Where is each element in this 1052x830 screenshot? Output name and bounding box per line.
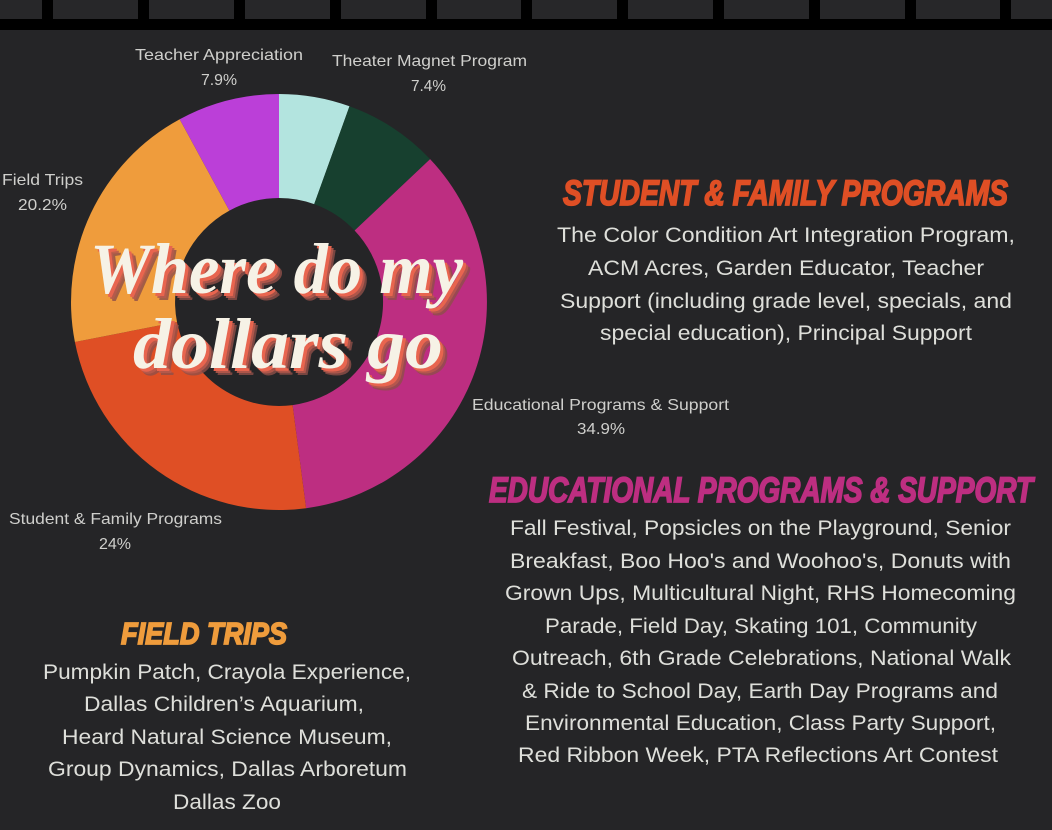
label: Theater Magnet Program [332, 53, 527, 95]
title: Where do my [95, 234, 469, 314]
segment: Theater Magnet Program [314, 106, 430, 230]
text: Field Trips details: Dallas Zoo [173, 791, 281, 814]
segment: Field Trips [71, 119, 229, 342]
label: Student & Family Programs: Student & Family Programs [9, 511, 222, 528]
text: Educational Programs & Support details: Breakfast, Boo Hoo's and Woohoo's, Donuts with [510, 550, 1011, 573]
label: Student & Family Programs [9, 511, 222, 553]
text: Educational Programs & Support details: Environmental Education, Class Party Support, [525, 712, 996, 735]
label: Field Trips: 20.2% [18, 197, 67, 214]
title: dollars go [136, 307, 446, 387]
text: Student & Family Programs details: Support (including grade level, specials, and [560, 290, 1012, 313]
text: Field Trips details [43, 661, 411, 814]
donut chart [71, 94, 487, 510]
segment: other (light teal) [279, 94, 350, 204]
text: Field Trips details: Heard Natural Science Museum, [62, 726, 392, 749]
text: Educational Programs & Support details [505, 517, 1016, 767]
text: Educational Programs & Support details: Parade, Field Day, Skating 101, Community [545, 615, 978, 638]
label: Theater Magnet Program: 7.4% [411, 78, 446, 95]
title: dollars go [138, 309, 448, 389]
segment: Teacher Appreciation [180, 94, 279, 211]
text: Student & Family Programs details: The Color Condition Art Integration Program, [557, 224, 1015, 247]
label: Field Trips [2, 172, 83, 214]
label: Educational Programs & Support: Educational Programs & Support [472, 397, 730, 414]
label: Teacher Appreciation [135, 47, 303, 89]
heading: Field Trips: FIELD TRIPS [121, 616, 287, 651]
text: Field Trips details: Pumpkin Patch, Crayola Experience, [43, 661, 411, 684]
title [90, 229, 471, 391]
label: Student & Family Programs: 24% [99, 536, 131, 553]
label: Field Trips: Field Trips [2, 172, 83, 189]
text: Educational Programs & Support details: Fall Festival, Popsicles on the Playground, Senior [510, 517, 1011, 540]
label: Teacher Appreciation: 7.9% [201, 72, 237, 89]
title: Where do my [97, 236, 471, 316]
label: Teacher Appreciation: Teacher Appreciation [135, 47, 303, 64]
text: Educational Programs & Support details: Red Ribbon Week, PTA Reflections Art Contest [518, 744, 998, 767]
text: Student & Family Programs details [557, 224, 1015, 345]
text: Student & Family Programs details: special education), Principal Support [600, 322, 972, 345]
text: Educational Programs & Support details: & Ride to School Day, Earth Day Programs and [522, 680, 998, 703]
text: Field Trips details: Group Dynamics, Dallas Arboretum [48, 758, 407, 781]
film strip header band [0, 0, 1052, 30]
title: Where do my [93, 232, 467, 312]
title: dollars go [133, 304, 443, 384]
text: Educational Programs & Support details: Grown Ups, Multicultural Night, RHS Homecoming [505, 582, 1016, 605]
segment: Student & Family Programs [75, 322, 306, 510]
title: dollars go [140, 311, 450, 391]
text: Educational Programs & Support details: Outreach, 6th Grade Celebrations, National Walk [512, 647, 1012, 670]
label: Educational Programs & Support: 34.9% [577, 421, 625, 438]
text: Field Trips details: Dallas Children’s Aquarium, [84, 693, 364, 716]
label: Educational Programs & Support [472, 397, 730, 438]
segment: Educational Programs & Support [293, 159, 487, 508]
label: Theater Magnet Program: Theater Magnet Program [332, 53, 527, 70]
text: Student & Family Programs details: ACM Acres, Garden Educator, Teacher [588, 257, 984, 280]
title: Where do my [90, 229, 464, 309]
